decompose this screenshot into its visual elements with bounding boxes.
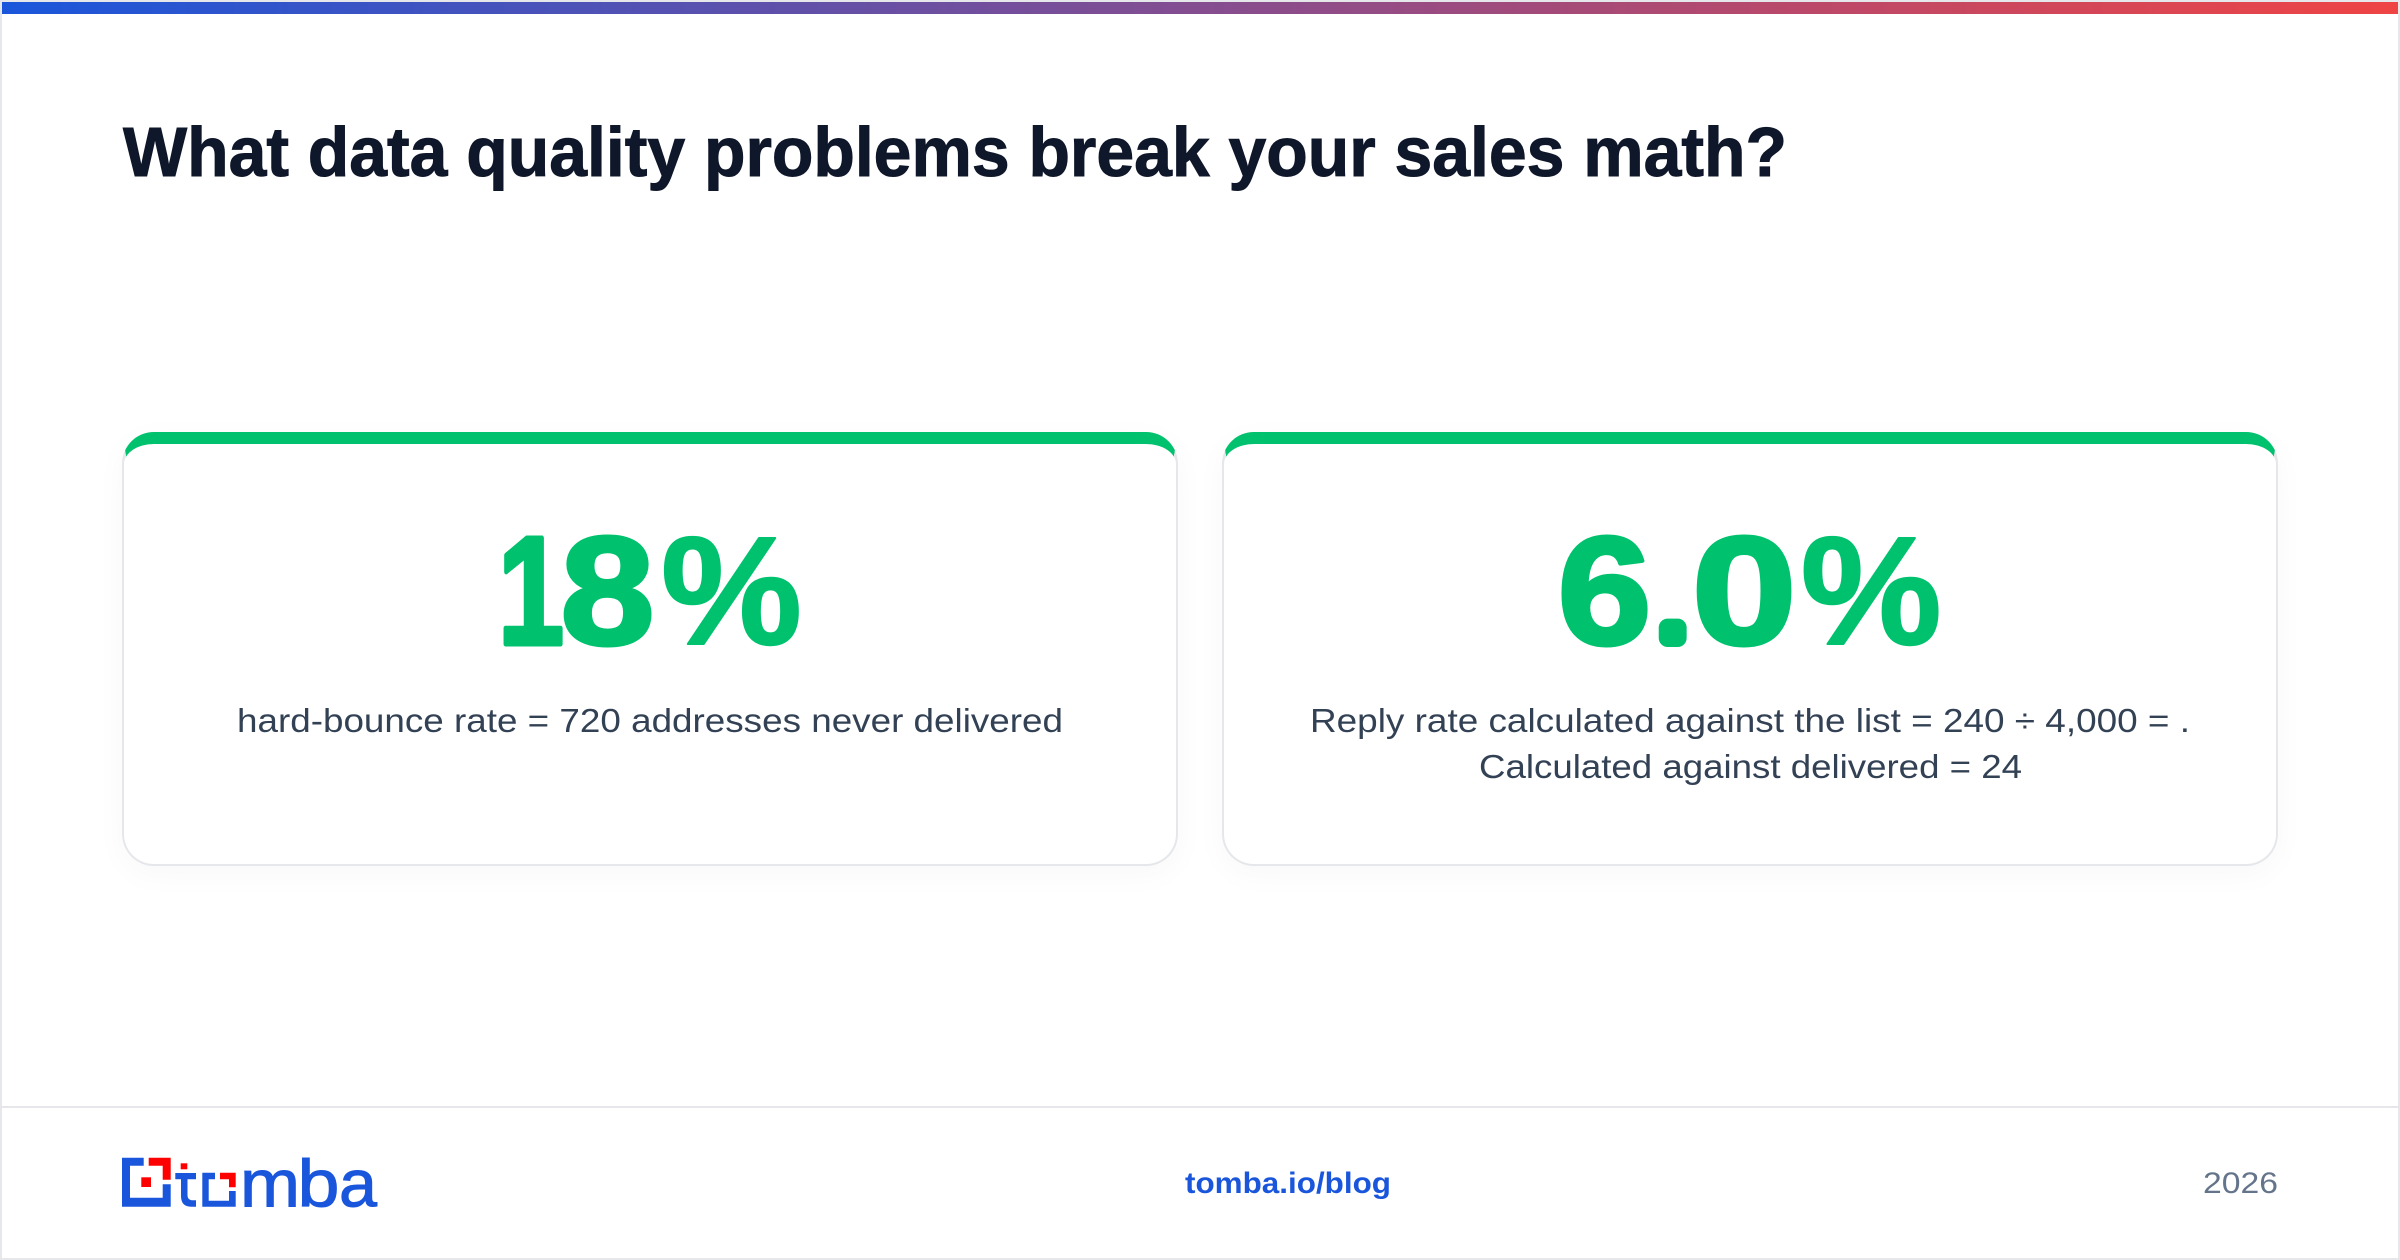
logo letters mba: m [240, 1147, 300, 1222]
logo letters mba: b [298, 1147, 340, 1222]
description: reply rate: Calculated against delivered = 24 [1479, 748, 2022, 785]
logo letter t [175, 1163, 196, 1207]
stat: 6.0%: 6 [1558, 505, 1652, 677]
stat: 18%: % [661, 505, 802, 677]
panel: hard-bounce rate [122, 432, 1178, 866]
description: reply rate [1310, 702, 2190, 785]
footer link: tomba.io/blog [1185, 1167, 1391, 1200]
title: What data quality problems break your sales math? [123, 113, 1787, 191]
description: hard-bounce rate: hard-bounce rate = 720 addresses never delivered [237, 702, 1063, 739]
stat: 6.0%: . [1663, 575, 1682, 653]
description: reply rate: Reply rate calculated against the list = 240 ÷ 4,000 = . [1310, 702, 2190, 739]
logo: tomba [122, 1147, 378, 1222]
top gradient bar [2, 2, 2398, 14]
stat: 6.0%: 0 [1692, 505, 1797, 677]
logo letters mba: a [339, 1147, 378, 1222]
stat: 6.0%: % [1801, 505, 1942, 677]
logo icon: bracket square [122, 1158, 171, 1207]
panel: reply rate [1222, 432, 2278, 866]
logo letter o [202, 1173, 236, 1207]
footer year: 2026 [2203, 1167, 2278, 1200]
footer [2, 1106, 2398, 1260]
stat: 18%: 8 [560, 505, 654, 677]
stat: 18%: 1 [498, 505, 564, 677]
